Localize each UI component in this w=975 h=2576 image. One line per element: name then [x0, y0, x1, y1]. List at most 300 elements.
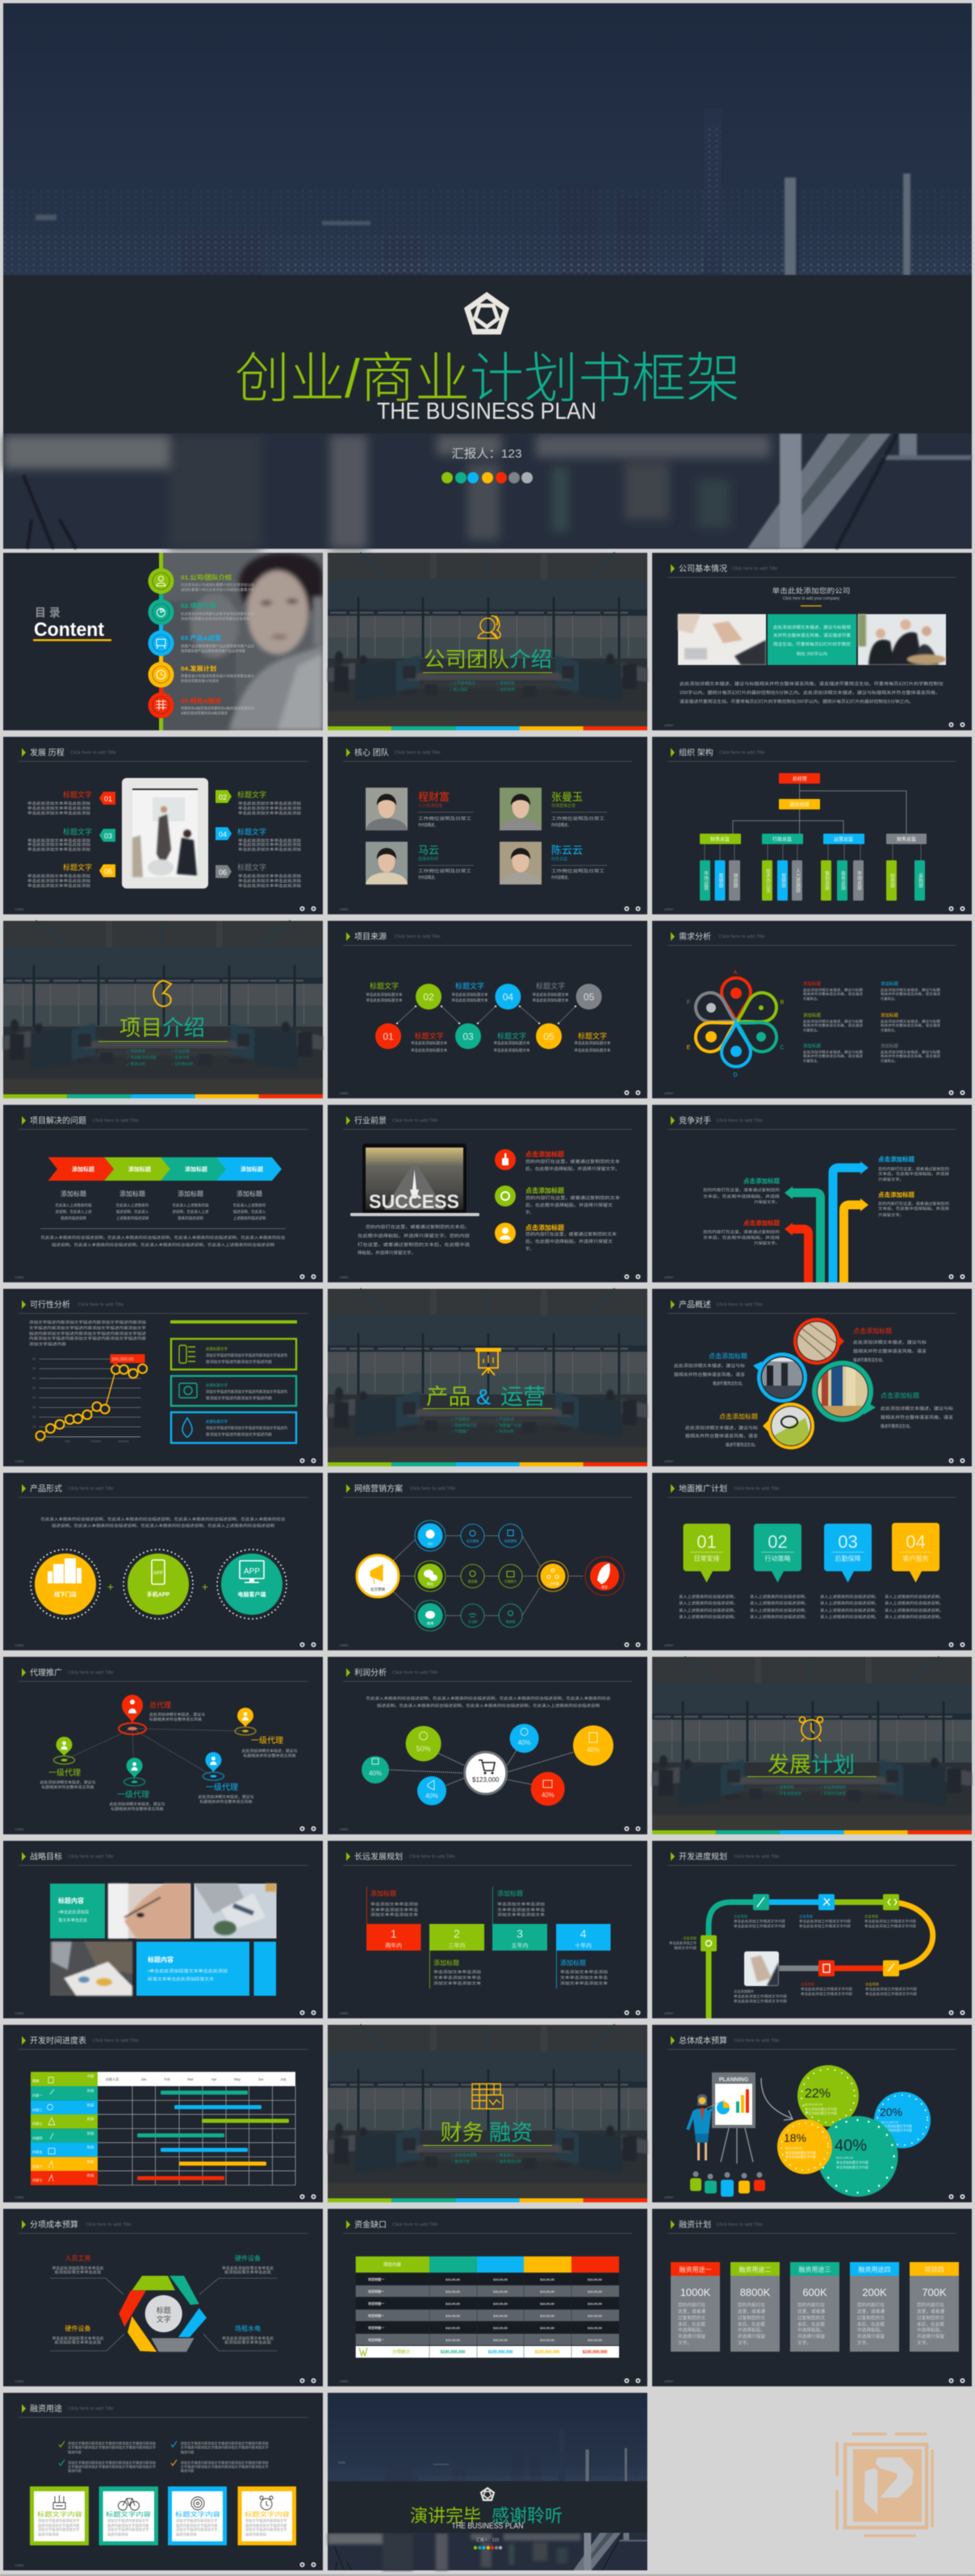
- checklist: 描述内容: [181, 2449, 194, 2455]
- labels: 单击此处添加标题文本: [533, 997, 569, 1003]
- panel: agency promotion: [3, 1657, 323, 1834]
- body paragraph: 语言描述尽量简洁生动。尽量将每页幻灯片的字数控制在200字以内，据统计每页幻灯片的最好控制在5分钟之内。: [680, 698, 914, 705]
- numbered circles: 02: [423, 991, 434, 1002]
- center heading: 单击此处添加您的公司: [772, 587, 851, 595]
- labels: 题相关并符合整体语言风格，语言: [881, 1414, 953, 1420]
- colour dots: [441, 472, 533, 483]
- numbered badges: 06: [219, 868, 227, 876]
- team member 3: 马云: [418, 844, 439, 856]
- note: blue: 文本单击添加文本单击: [560, 1975, 609, 1980]
- gantt table: Jun: [258, 2077, 264, 2081]
- team member 1: 程财富: [418, 791, 450, 803]
- label: bottom right: 单击此处添加段落文本单击此: [222, 2336, 274, 2341]
- column four: 中选择粘贴，: [857, 2327, 885, 2333]
- panel: long-term plan: [328, 1841, 647, 2018]
- gantt table: 周期: [32, 2079, 39, 2084]
- heading: 竞争对手: [679, 1115, 711, 1126]
- labels: 此处添加详细文本描述，建议与标: [685, 1424, 758, 1431]
- summary text: 描述说明。在此录入本图表的综合描述说明，在此录入本图表的综合描述说明，在此录入上述图表的综合描述说明: [52, 1242, 275, 1248]
- text columns: 尽量简洁。: [881, 1058, 898, 1064]
- heading: [328, 1657, 647, 1834]
- footer: LOGO: [15, 1460, 24, 1463]
- satellite: blue lower: 40%: [425, 1792, 438, 1800]
- checklist: 添加文字描述内容添加文字描述内容添加文字描述内容添加: [68, 2440, 156, 2446]
- roadmap notes: 单击此处添加工作描述文字内容: [801, 1986, 852, 1992]
- numbered circles: 04: [503, 991, 513, 1002]
- card: green: [171, 1339, 296, 1370]
- card 01: 01: [697, 1532, 717, 1552]
- satellite: green: [406, 1726, 441, 1762]
- section list: ✓ 产品形式: [496, 1416, 514, 1422]
- panel: development history: [3, 737, 323, 914]
- label: bottom left: 硬件设备: [65, 2324, 90, 2332]
- column text: 录入上述图表的综合描述说明，: [885, 1600, 944, 1606]
- bubble: green 22%: 22%: [805, 2087, 831, 2101]
- satellite: teal: 40%: [369, 1770, 382, 1777]
- team member 4: 陈云云: [551, 844, 583, 856]
- numbered badges: 02: [219, 793, 227, 801]
- heading: 项目来源: [354, 931, 387, 942]
- labels right: 文本后，在此框中选择粘贴，并选择: [878, 1206, 950, 1211]
- panel: strategic goals: [3, 1841, 323, 2018]
- gantt table: 内容: [87, 2073, 94, 2079]
- labels right: 只保留文字。: [878, 1212, 904, 1218]
- team member 3: 作内容概述。: [418, 874, 437, 880]
- petal letters: E: [687, 1045, 691, 1051]
- labels: 单击此处添加标题文本: [494, 1040, 530, 1046]
- heading: Click here to add Title: [395, 751, 441, 755]
- item 2: 后，在此框中选择粘贴，并选择只保留文: [525, 1202, 613, 1208]
- column three: 您的内容打在: [797, 2302, 825, 2308]
- zigzag connectors: [396, 1006, 576, 1024]
- item 3: 字。: [525, 1245, 534, 1252]
- section list: ✓ 发展历程: [496, 680, 515, 686]
- photo: business meeting: [858, 614, 946, 665]
- stage boxes: 4: [580, 1927, 587, 1940]
- column one: 1000K: [680, 2286, 711, 2298]
- team member 3: 工作岗位说明及日常工: [418, 868, 471, 874]
- summary text: [40, 1235, 286, 1248]
- footer: LOGO: [340, 1828, 349, 1831]
- contents items: 简要发展计划描述简要发展计划描述简要发展计: [181, 673, 254, 679]
- line chart: 20: [32, 1416, 36, 1419]
- center heading: Click here to add your company: [783, 596, 840, 601]
- card: bicycle: [99, 2486, 158, 2545]
- closing title: 感谢聆听: [492, 2506, 563, 2526]
- satellite: teal: [362, 1756, 389, 1784]
- labels: 单击此处添加标题文本: [366, 997, 403, 1003]
- column text: 录入上述图表的综合描述说明，: [750, 1600, 809, 1606]
- right labels: 单击此处添加文本单击此处添加: [238, 801, 302, 806]
- note: teal: 添加标题: [497, 1889, 523, 1897]
- column text: 录入上述图表的综合描述说明，: [679, 1600, 738, 1606]
- column two: 过复制您的文: [738, 2315, 765, 2321]
- labels left: 点击添加标题: [743, 1219, 780, 1227]
- node row: top: [415, 1520, 522, 1551]
- section title: 发展: [768, 1753, 811, 1777]
- line chart: 50: [32, 1386, 36, 1390]
- funding table: $100,000,000: [583, 2350, 608, 2355]
- line chart: October: [90, 1440, 102, 1443]
- labels left: 点击添加标题: [743, 1177, 780, 1185]
- item 3: [495, 1223, 617, 1252]
- labels left: 您的内容打在这里，或者通过复制您的: [703, 1229, 780, 1235]
- funding table: $100,000,000: [441, 2350, 466, 2355]
- circle: desktop app: 电脑客户端: [237, 1591, 266, 1598]
- column four: [850, 2262, 899, 2352]
- bubble: green 22%: 单击添加标题文字内容: [805, 2106, 837, 2111]
- bubble: blue 20%: 单击添加标题文字内容: [881, 2124, 912, 2128]
- flower diagram: [690, 978, 782, 1067]
- heading: Click here to add Title: [68, 1671, 114, 1675]
- team member 2: 工作岗位说明及日常工: [551, 815, 605, 822]
- card: disc: [168, 2486, 227, 2545]
- heading: [652, 2025, 972, 2202]
- labels: 单击此处添加标题文本: [366, 992, 403, 997]
- text columns: 添加标题: [803, 1043, 822, 1049]
- subtitle: english: THE BUSINESS PLAN: [377, 399, 596, 424]
- line chart: 80: [32, 1357, 36, 1361]
- note: blue: 添加标题: [560, 1959, 586, 1967]
- text columns: 此处添加详细文本描述，建议与标题: [881, 1018, 941, 1024]
- column one: 融资用途一: [680, 2265, 712, 2273]
- column text: [679, 1594, 944, 1620]
- right labels: 单击此处添加文本单击此处添加: [238, 883, 302, 889]
- labels left: 您的内容打在这里，或者通过复制您的: [703, 1187, 780, 1193]
- heading: [652, 1473, 972, 1650]
- bubble: blue 20%: $121,000.00: [881, 2121, 898, 2124]
- card: clock: [237, 2486, 296, 2545]
- four columns: 添加标题: [236, 1190, 262, 1198]
- node row: middle: [415, 1561, 522, 1591]
- blue text tile: 标题内容: [148, 1955, 174, 1963]
- panel: core team: [328, 737, 647, 914]
- gantt table: 阶段: [87, 2088, 94, 2093]
- funding table: $10,00,00: [446, 2277, 461, 2281]
- left labels: 单击此处添加文本单击此处添加: [27, 873, 91, 879]
- item 1: [495, 1149, 620, 1172]
- org nodes: 副总经理: [790, 801, 810, 808]
- roadmap notes: 点击添加: [683, 1935, 697, 1941]
- heading: [328, 1473, 647, 1650]
- heading: [328, 921, 647, 1098]
- heading: [3, 1289, 323, 1466]
- org nodes: 行政总监: [772, 836, 792, 843]
- title: chinese: 创业/商业: [235, 349, 470, 409]
- roadmap notes: 点击添加: [801, 1981, 814, 1987]
- heading: 可行性分析: [30, 1299, 70, 1310]
- column text: 录入上述图表的综合描述说明，: [750, 1608, 809, 1613]
- funding table: $10,00,00: [588, 2302, 603, 2306]
- node: red rocket: 成交: [601, 1584, 608, 1589]
- labels: 题相关并符合整体语言风格，语言: [853, 1348, 927, 1354]
- org nodes: [700, 773, 927, 844]
- note: red: 添加标题: [370, 1889, 396, 1897]
- line chart: 60: [32, 1377, 36, 1380]
- label: top left: 处添加段落文本单击此处: [55, 2269, 102, 2275]
- satellite: red: [531, 1772, 565, 1806]
- text columns: 此处添加详细文本描述，建议与标题: [803, 1049, 864, 1055]
- gantt table: 对接人员: [106, 2076, 119, 2082]
- heading: [328, 1105, 647, 1282]
- four columns: 添加标题: [119, 1190, 145, 1198]
- labels: 一级代理: [48, 1768, 81, 1778]
- roadmap notes: 单击此处添加工作描述文字内容: [801, 1991, 852, 1997]
- heading: [652, 737, 972, 914]
- column text: 录入上述图表的综合描述说明，: [820, 1608, 879, 1613]
- bottom edge: [0, 2574, 975, 2576]
- petal letters: A: [734, 970, 738, 976]
- card 01: [683, 1524, 730, 1583]
- heading: 发展 历程: [30, 747, 65, 758]
- description: 描述内容添加文字描述内容添加文字描述内容添加文字描述: [29, 1331, 147, 1336]
- gantt table: 内容二: [32, 2107, 43, 2113]
- labels: 此处添加详细文本描述，建议与: [242, 1748, 297, 1754]
- gantt table: 内容七: [32, 2177, 43, 2183]
- label: top left: [52, 2254, 104, 2275]
- node: red rocket: [585, 1557, 624, 1595]
- section list: ✓ 组织架构: [496, 687, 515, 692]
- node: yellow share: 二次传播: [546, 1582, 559, 1586]
- heading: Click here to add Title: [93, 2039, 139, 2043]
- section list: ✓ 开发进度规划: [776, 1791, 801, 1796]
- watermark stamp: [837, 2434, 932, 2536]
- text columns: 添加标题: [881, 981, 899, 987]
- footer: LOGO: [664, 724, 673, 727]
- hexagon diagram: 标题: [157, 2306, 171, 2315]
- team member 1: [366, 788, 474, 830]
- heading: Click here to add Title: [717, 1119, 763, 1123]
- checklist: 文字描述内容添加文字描述内容添加文字描述内容添加文字: [68, 2444, 156, 2450]
- labels: 单击此处添加标题文本: [533, 992, 569, 997]
- heading: 代理推广: [30, 1667, 62, 1678]
- right labels: 单击此处添加文本单击此处添加: [238, 842, 302, 847]
- footer: LOGO: [15, 2380, 24, 2383]
- chevron process: 添加标题: [185, 1165, 207, 1173]
- note: teal: 单击添加文本单击添加: [497, 1901, 546, 1907]
- column five: 您的内容打在: [917, 2302, 944, 2308]
- paragraph: 打在这里，或者通过复制您的文本后，在此框中选: [358, 1241, 470, 1248]
- footer: LOGO: [15, 908, 24, 911]
- photo: woman portrait: [163, 553, 323, 730]
- footer: LOGO: [664, 1644, 673, 1647]
- numbered badges: 05: [104, 868, 112, 876]
- icon: presentation board: [476, 1349, 500, 1375]
- roadmap notes: 单击此处添加工作描述文字内容: [734, 1998, 787, 2004]
- team member 3: [366, 842, 474, 884]
- labels: [366, 981, 611, 1053]
- labels: 一级代理: [117, 1790, 149, 1800]
- team member 2: 市场营销主管: [551, 803, 575, 809]
- description: 文字描述内容添加文字描述内容添加文字描述内容添加文字: [29, 1325, 147, 1331]
- checklist: 文字描述内容添加文字描述内容添加文字描述内容添加文字: [68, 2464, 156, 2469]
- heading: Click here to add Title: [395, 935, 441, 939]
- gantt table: Apr: [211, 2077, 217, 2081]
- item 1: 点击添加标题: [525, 1150, 564, 1158]
- right labels: 单击此处添加文本单击此处添加: [238, 847, 302, 852]
- card: disc: 添加文字描述内容添加文字: [176, 2527, 218, 2532]
- panel: problems solved: [3, 1105, 323, 1282]
- left labels: [27, 790, 92, 889]
- circle: desktop app: APP: [244, 1567, 260, 1576]
- section list: ✓ 核心团队: [450, 687, 468, 692]
- card 03: 03: [838, 1532, 858, 1552]
- teal text panel: 简洁生动。尽量将每页幻灯片的字数控: [773, 642, 851, 647]
- bubble: blue 20%: 单击添加标题文字内容: [881, 2128, 912, 2132]
- labels: 点击添加标题: [709, 1352, 747, 1360]
- section title: 运营: [500, 1385, 546, 1409]
- item 2: 您的内容打在这里，或者通过复制您的文本: [525, 1194, 620, 1201]
- curved arrow: [761, 2078, 793, 2120]
- column text: 录入上述图表的综合描述说明，: [820, 1600, 879, 1606]
- item 3: 您的内容打在这里，或者通过复制您的文本: [525, 1231, 617, 1237]
- labels: 描述尽量简洁生动。: [726, 1441, 758, 1448]
- funding table: $10,00,00: [540, 2314, 555, 2318]
- item 3: 点击添加标题: [525, 1223, 564, 1232]
- team member 4: 工作岗位说明及日常工: [551, 868, 605, 874]
- column one: 这里，或者通: [678, 2308, 705, 2315]
- section title: 融资: [489, 2121, 533, 2145]
- four columns: 图表的描述说明: [61, 1215, 86, 1221]
- stage boxes: 1: [391, 1927, 397, 1940]
- satellite: red: 40%: [542, 1792, 554, 1799]
- numbered circles: 05: [584, 991, 595, 1002]
- checklist: 文字描述内容添加文字描述内容添加文字描述内容添加文字: [181, 2444, 269, 2450]
- title: chinese: [235, 349, 740, 409]
- text columns: 尽量简洁。: [803, 1058, 820, 1064]
- item 2: 字。: [525, 1209, 534, 1215]
- column two: 您的内容打在: [738, 2302, 765, 2308]
- roadmap notes: [669, 1913, 917, 2004]
- footer: LOGO: [15, 2012, 24, 2015]
- card: teal: [171, 1376, 296, 1406]
- section list: ✓ 需求分析: [127, 1061, 145, 1067]
- blue text tile: 段落文本单击此处添加段落文本: [148, 1976, 214, 1982]
- panel: section company team: [328, 553, 647, 730]
- funding table: $10,00,00: [588, 2314, 603, 2318]
- footer: LOGO: [664, 1092, 673, 1095]
- numbered circles: [375, 984, 602, 1049]
- blue text tile: [136, 1942, 249, 1996]
- heading: Click here to add Title: [392, 1671, 438, 1675]
- funding table: $100,000,000: [535, 2350, 560, 2355]
- org departments: 商务总部: [839, 870, 846, 891]
- panel: closing slide: [328, 2393, 647, 2570]
- laptop illustration: SUCCESS: [369, 1191, 459, 1213]
- circle: store: [31, 1549, 100, 1619]
- funding table: 项目内容: [383, 2261, 401, 2268]
- dotted links: [394, 1536, 584, 1616]
- roadmap notes: 单击此处添加工作描述文字内容: [734, 1993, 787, 1999]
- funding table: $10,00,00: [588, 2326, 603, 2330]
- checklist: 添加文字描述内容添加文字描述内容添加文字描述内容添加: [181, 2460, 269, 2465]
- four columns: 描述说明，在此录入: [116, 1209, 149, 1215]
- teal text panel: [768, 614, 856, 665]
- line chart: 70: [32, 1367, 36, 1370]
- section list: ✓ 行业前景: [171, 1048, 190, 1054]
- labels: 单击此处添加标题文本: [411, 1048, 448, 1053]
- left labels: 单击此处添加文本单击此处添加: [27, 838, 91, 843]
- icon: person: [478, 616, 500, 638]
- section list: ✓ 资金缺口: [496, 2152, 514, 2158]
- funding table: $10,00,00: [588, 2277, 603, 2281]
- heading: 开发时间进度表: [30, 2035, 86, 2046]
- labels right: [878, 1155, 950, 1218]
- heading: [3, 1657, 323, 1834]
- section list: ✓ 融资用途分析: [496, 2159, 521, 2164]
- panel: total cost budget: [652, 2025, 972, 2202]
- blue sliver: [253, 1942, 276, 1996]
- card: bicycle: 描述内容添加: [107, 2532, 128, 2537]
- card: router: 描述内容添加: [38, 2532, 59, 2537]
- node row: top: 拍照营销: [504, 1539, 517, 1543]
- note: blue: 添加文本单击添加文本: [560, 1980, 609, 1986]
- four columns: 描述说明，在此录入: [233, 1209, 266, 1215]
- funding table: $10,00,00: [493, 2314, 508, 2318]
- text columns: 此处添加详细文本描述，建议与标题: [881, 987, 941, 993]
- labels: 点击添加标题: [719, 1412, 758, 1420]
- left labels: 标题文字: [63, 827, 92, 836]
- stage boxes: 3: [517, 1927, 523, 1940]
- node row: middle: 朋友圈: [468, 1579, 477, 1583]
- column two: 这里，或者通: [738, 2308, 765, 2315]
- text columns: 相关并符合整体语言风格，语言描述: [881, 1053, 941, 1059]
- heading: 需求分析: [679, 931, 711, 942]
- column two: 融资用途二: [739, 2265, 772, 2273]
- heading: 产品形式: [30, 1483, 62, 1494]
- org nodes: 运营总监: [834, 836, 853, 843]
- hexagon diagram: 文字: [157, 2315, 171, 2323]
- teal text tile: •单击此处添加段: [58, 1909, 89, 1915]
- right labels: 单击此处添加文本单击此处添加: [238, 838, 302, 843]
- heading: Click here to add Title: [719, 751, 765, 755]
- line chart: 10: [32, 1425, 36, 1428]
- contents items: 01.公司/团队介绍: [181, 573, 232, 581]
- labels left: 文本后，在此框中选择粘贴，并选择: [703, 1235, 780, 1240]
- roadmap notes: 描述文字内容: [674, 1945, 697, 1951]
- section list: [451, 1416, 521, 1434]
- column text: 录入上述图表的综合描述说明。: [885, 1614, 944, 1620]
- roadmap notes: 单击此处添加工作描述文字内容: [734, 1918, 785, 1924]
- gantt table: July: [280, 2077, 287, 2081]
- org nodes: 财务总监: [897, 836, 916, 843]
- labels: 标题文字: [497, 1031, 526, 1040]
- funding table: $10,00,00: [588, 2338, 603, 2342]
- checklist: 描述内容: [68, 2468, 82, 2474]
- left labels: 单击此处添加文本单击此处添加: [27, 842, 91, 847]
- heading: 产品概述: [679, 1299, 711, 1310]
- labels: 此处添加详细文本描述，建议与: [40, 1779, 95, 1785]
- hub: broadcast: [357, 1555, 399, 1597]
- description: 内容添加文字描述内容添加文字描述内容添加文字描述内容: [29, 1336, 147, 1341]
- column one: 文字。: [678, 2340, 692, 2346]
- column four: 融资用途四: [859, 2265, 891, 2273]
- blue text tile: •单击此处添加段落文本单击此处添加: [148, 1968, 228, 1974]
- teal text panel: 关并符合整体语言风格，语言描述尽量: [773, 633, 851, 638]
- column text: 录入上述图表的综合描述说明。: [820, 1614, 879, 1620]
- title: contents: 目 录: [35, 606, 61, 619]
- team member 3: 首席架构师: [418, 856, 438, 862]
- section list: ✓ 可行性分析: [171, 1061, 194, 1067]
- footer: LOGO: [664, 1276, 673, 1279]
- paragraph: [358, 1223, 470, 1256]
- labels left: 只保留文字。: [754, 1240, 780, 1246]
- section title: 介绍: [162, 1016, 205, 1040]
- stage boxes: 2: [454, 1927, 460, 1940]
- heading: Click here to add Title: [86, 2223, 132, 2227]
- card 03: [824, 1524, 872, 1583]
- heading: Click here to add Title: [70, 751, 116, 755]
